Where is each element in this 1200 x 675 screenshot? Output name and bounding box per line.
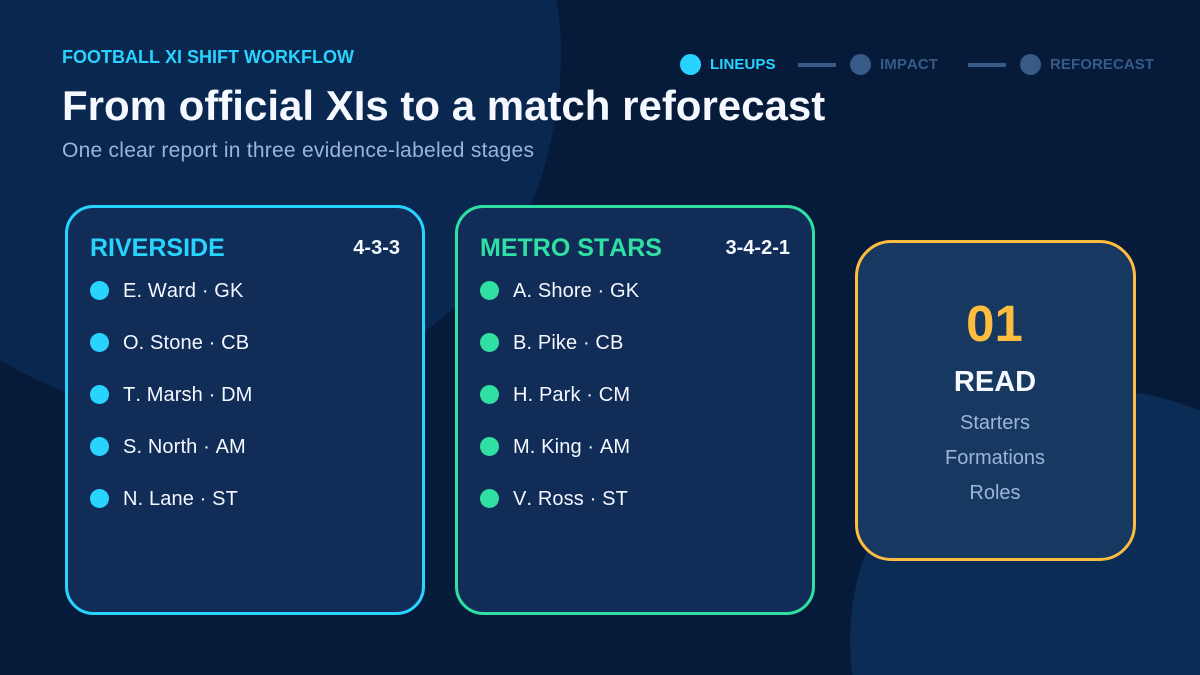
text: O. Stone · CB (123, 332, 249, 354)
text: M. King · AM (513, 436, 630, 458)
text: H. Park · CM (513, 384, 630, 406)
stage item: starters: Starters (960, 412, 1030, 434)
Metro Stars team name: METRO STARS (480, 234, 662, 262)
Riverside player list: E. Ward · GK (123, 280, 243, 302)
subtitle: One clear report in three evidence-labeled stages (62, 139, 534, 162)
eyebrow: FOOTBALL XI SHIFT WORKFLOW (62, 47, 354, 67)
Riverside formation: 4-3-3 (353, 237, 400, 259)
text: B. Pike · CB (513, 332, 623, 354)
stage name: READ (954, 366, 1036, 398)
text: T. Marsh · DM (123, 384, 252, 406)
text: N. Lane · ST (123, 488, 238, 510)
stage item: roles: Roles (969, 482, 1021, 504)
text: V. Ross · ST (513, 488, 628, 510)
step label: lineups: LINEUPS (710, 56, 776, 73)
step label: reforecast: REFORECAST (1050, 56, 1154, 73)
Metro Stars player list: A. Shore · GK (513, 280, 639, 302)
stage number: 01 (966, 295, 1023, 352)
Metro Stars formation: 3-4-2-1 (726, 237, 790, 259)
title: From official XIs to a match reforecast (62, 82, 825, 129)
Riverside team name: RIVERSIDE (90, 234, 225, 262)
text: S. North · AM (123, 436, 246, 458)
step label: impact: IMPACT (880, 56, 938, 73)
stage item: formations: Formations (945, 447, 1045, 469)
